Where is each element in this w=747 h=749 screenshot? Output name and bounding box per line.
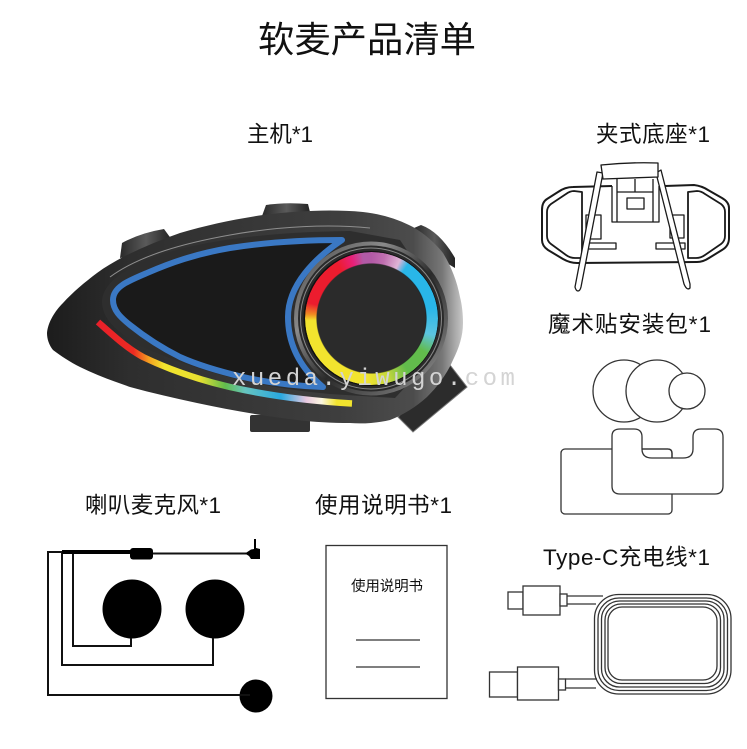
device top highlight xyxy=(110,226,370,277)
device metal ring xyxy=(294,242,448,396)
heading: main unit: 主机*1 xyxy=(247,122,313,147)
device black panel with blue outline xyxy=(113,240,342,387)
heading: clip base: 夹式底座*1 xyxy=(596,122,710,147)
heading: speaker and microphone: 喇叭麦克风*1 xyxy=(85,493,221,518)
device colored ring xyxy=(304,252,438,385)
manual title: 使用说明书 xyxy=(351,578,423,595)
icon: speaker and microphone xyxy=(48,539,272,712)
title: 软麦产品清单 xyxy=(258,19,476,60)
icon: velcro kit xyxy=(561,360,723,514)
device buttons xyxy=(120,203,467,432)
watermark: xueda.yiwugo.com xyxy=(232,366,518,393)
heading: Type-C cable: Type-C充电线*1 xyxy=(543,545,710,570)
icon: clip base xyxy=(542,163,729,291)
heading: velcro kit: 魔术贴安装包*1 xyxy=(548,312,711,337)
device plate xyxy=(102,231,440,398)
device: main unit xyxy=(47,203,467,432)
icon: user manual xyxy=(326,546,447,698)
device body xyxy=(47,211,463,423)
icon: Type-C cable xyxy=(490,586,731,700)
heading: user manual: 使用说明书*1 xyxy=(315,493,452,518)
device rainbow strip xyxy=(98,322,352,404)
